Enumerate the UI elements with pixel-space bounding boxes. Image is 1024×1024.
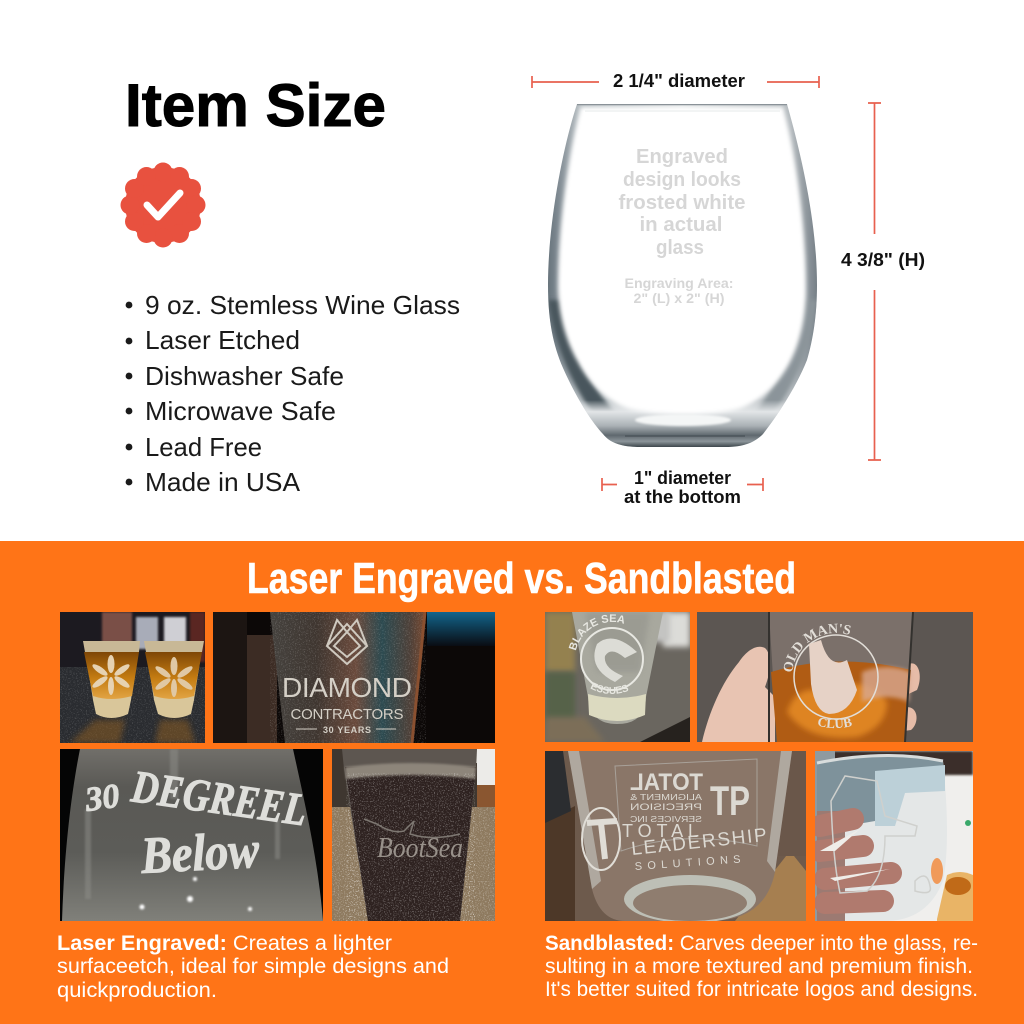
dimension: rim diameter: 2 1/4" diameter	[613, 71, 745, 91]
engraved note on glass: Engraved	[636, 146, 728, 168]
photo: 30 Degreel Below glass: 30	[82, 778, 122, 819]
photo: Old Man's Club glass in hand: OLD MAN'S	[784, 624, 851, 672]
photo: Total Leadership Solutions glass: TP	[710, 777, 750, 824]
feature list	[126, 290, 460, 497]
engraved note on glass: 2" (L) x 2" (H)	[634, 291, 724, 306]
feature list: 9 oz. Stemless Wine Glass	[145, 290, 460, 320]
photo: Diamond Contractors pint glass: 30 YEARS	[323, 725, 371, 735]
text: laser engraved description: surfaceetch, ideal for simple designs and	[57, 955, 449, 978]
photo: shot glasses with leaf design	[60, 612, 205, 743]
photo: Total Leadership Solutions glass: SERVICES INC	[630, 815, 702, 824]
panel: orange comparison band	[0, 541, 1024, 1024]
engraved note on glass	[618, 146, 746, 306]
photo: Diamond Contractors pint glass	[213, 612, 495, 743]
photo: Total Leadership Solutions glass: TOTAL	[630, 769, 703, 796]
feature list: Laser Etched	[145, 325, 300, 355]
photo: Total Leadership Solutions glass: ALIGNMENT &	[629, 793, 702, 802]
photo: Boot Sea glass with cola: BootSea	[377, 833, 463, 864]
heading: Laser Engraved vs. Sandblasted	[247, 554, 796, 603]
engraved note on glass: glass	[656, 237, 704, 259]
dimension: height	[841, 103, 925, 460]
title: Item Size	[125, 72, 386, 139]
feature list: Microwave Safe	[145, 396, 336, 426]
photo: dragon shot glass: BLAZE SEA	[568, 614, 624, 650]
dimension: height: 4 3/8" (H)	[841, 250, 925, 270]
photo: Total Leadership Solutions glass: PRECISION	[630, 802, 702, 812]
photo: stemless glass with fox design	[815, 751, 973, 921]
photo: Diamond Contractors pint glass: DIAMOND	[282, 672, 412, 703]
photo: dragon shot glass: ESSUES	[590, 682, 628, 694]
dimension: base diameter: 1" diameter	[634, 468, 731, 488]
engraved note on glass: Engraving Area:	[624, 276, 734, 291]
icon: check badge	[120, 162, 206, 248]
text: laser engraved description: quickproduction.	[57, 979, 217, 1002]
text: sandblasted description	[545, 932, 978, 1001]
photo: Total Leadership Solutions glass	[545, 751, 806, 921]
text: laser engraved description: Laser Engraved: Creates a lighter	[57, 932, 392, 955]
photo: dragon shot glass	[545, 612, 690, 742]
photo: 30 Degreel Below glass	[60, 749, 323, 921]
text: laser engraved description	[57, 932, 449, 1002]
engraved note on glass: in actual	[640, 214, 722, 236]
photo: Total Leadership Solutions glass: LEADERSHIP	[630, 825, 768, 860]
feature list: Dishwasher Safe	[145, 361, 344, 391]
photo: Boot Sea glass with cola	[332, 749, 495, 921]
photo: Total Leadership Solutions glass: SOLUTIONS	[634, 854, 741, 873]
feature list: Made in USA	[145, 467, 301, 497]
glass illustration	[540, 100, 825, 450]
photo: Diamond Contractors pint glass: CONTRACTORS	[290, 706, 404, 723]
text: sandblasted description: Sandblasted: Carves deeper into the glass, re-	[545, 932, 978, 955]
photo: Total Leadership Solutions glass: TOTAL	[622, 821, 698, 841]
photo: Old Man's Club glass in hand: CLUB	[818, 718, 852, 728]
photo: Old Man's Club glass in hand	[697, 612, 973, 742]
engraved note on glass: frosted white	[618, 192, 746, 214]
dimension: base diameter	[602, 468, 763, 507]
engraved note on glass: design looks	[623, 169, 741, 191]
dimension: base diameter: at the bottom	[624, 487, 741, 507]
text: sandblasted description: sulting in a more textured and premium finish.	[545, 955, 973, 978]
photo: 30 Degreel Below glass: Below	[139, 822, 261, 885]
dimension: rim diameter	[532, 71, 819, 91]
feature list: Lead Free	[145, 432, 262, 462]
text: sandblasted description: It's better suited for intricate logos and designs.	[545, 978, 978, 1001]
